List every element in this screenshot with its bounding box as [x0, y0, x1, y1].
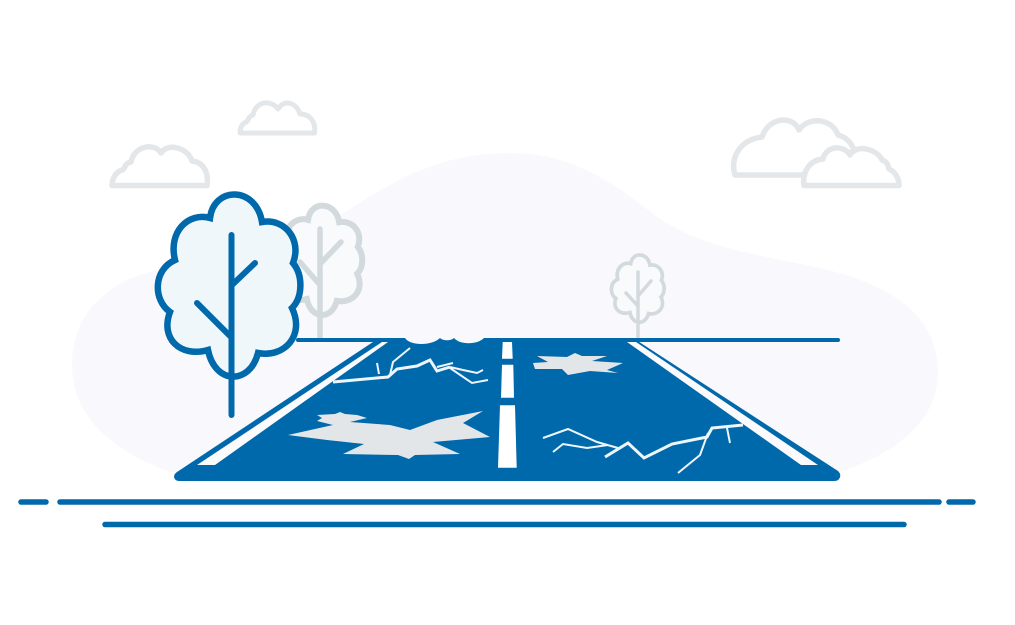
cloud: right large [734, 120, 854, 175]
horizon line [298, 338, 838, 342]
tree: large foreground tree [158, 194, 300, 415]
crack: upper left [333, 348, 488, 383]
cloud: right small [804, 148, 899, 186]
centre dashes [498, 342, 517, 468]
cloud: top left small [240, 103, 315, 133]
left edge stripe [197, 342, 388, 465]
cloud: left [112, 147, 207, 186]
road [174, 338, 840, 481]
large pothole [288, 411, 490, 459]
tree: light background tree [277, 206, 362, 338]
tree: distant small tree [611, 255, 664, 338]
crack: lower right [543, 425, 743, 473]
road edge scallops [405, 338, 484, 344]
background blob [72, 153, 938, 472]
road surface [174, 338, 840, 481]
small pothole [533, 353, 623, 375]
ground lines [21, 502, 973, 524]
right edge stripe [627, 342, 818, 465]
